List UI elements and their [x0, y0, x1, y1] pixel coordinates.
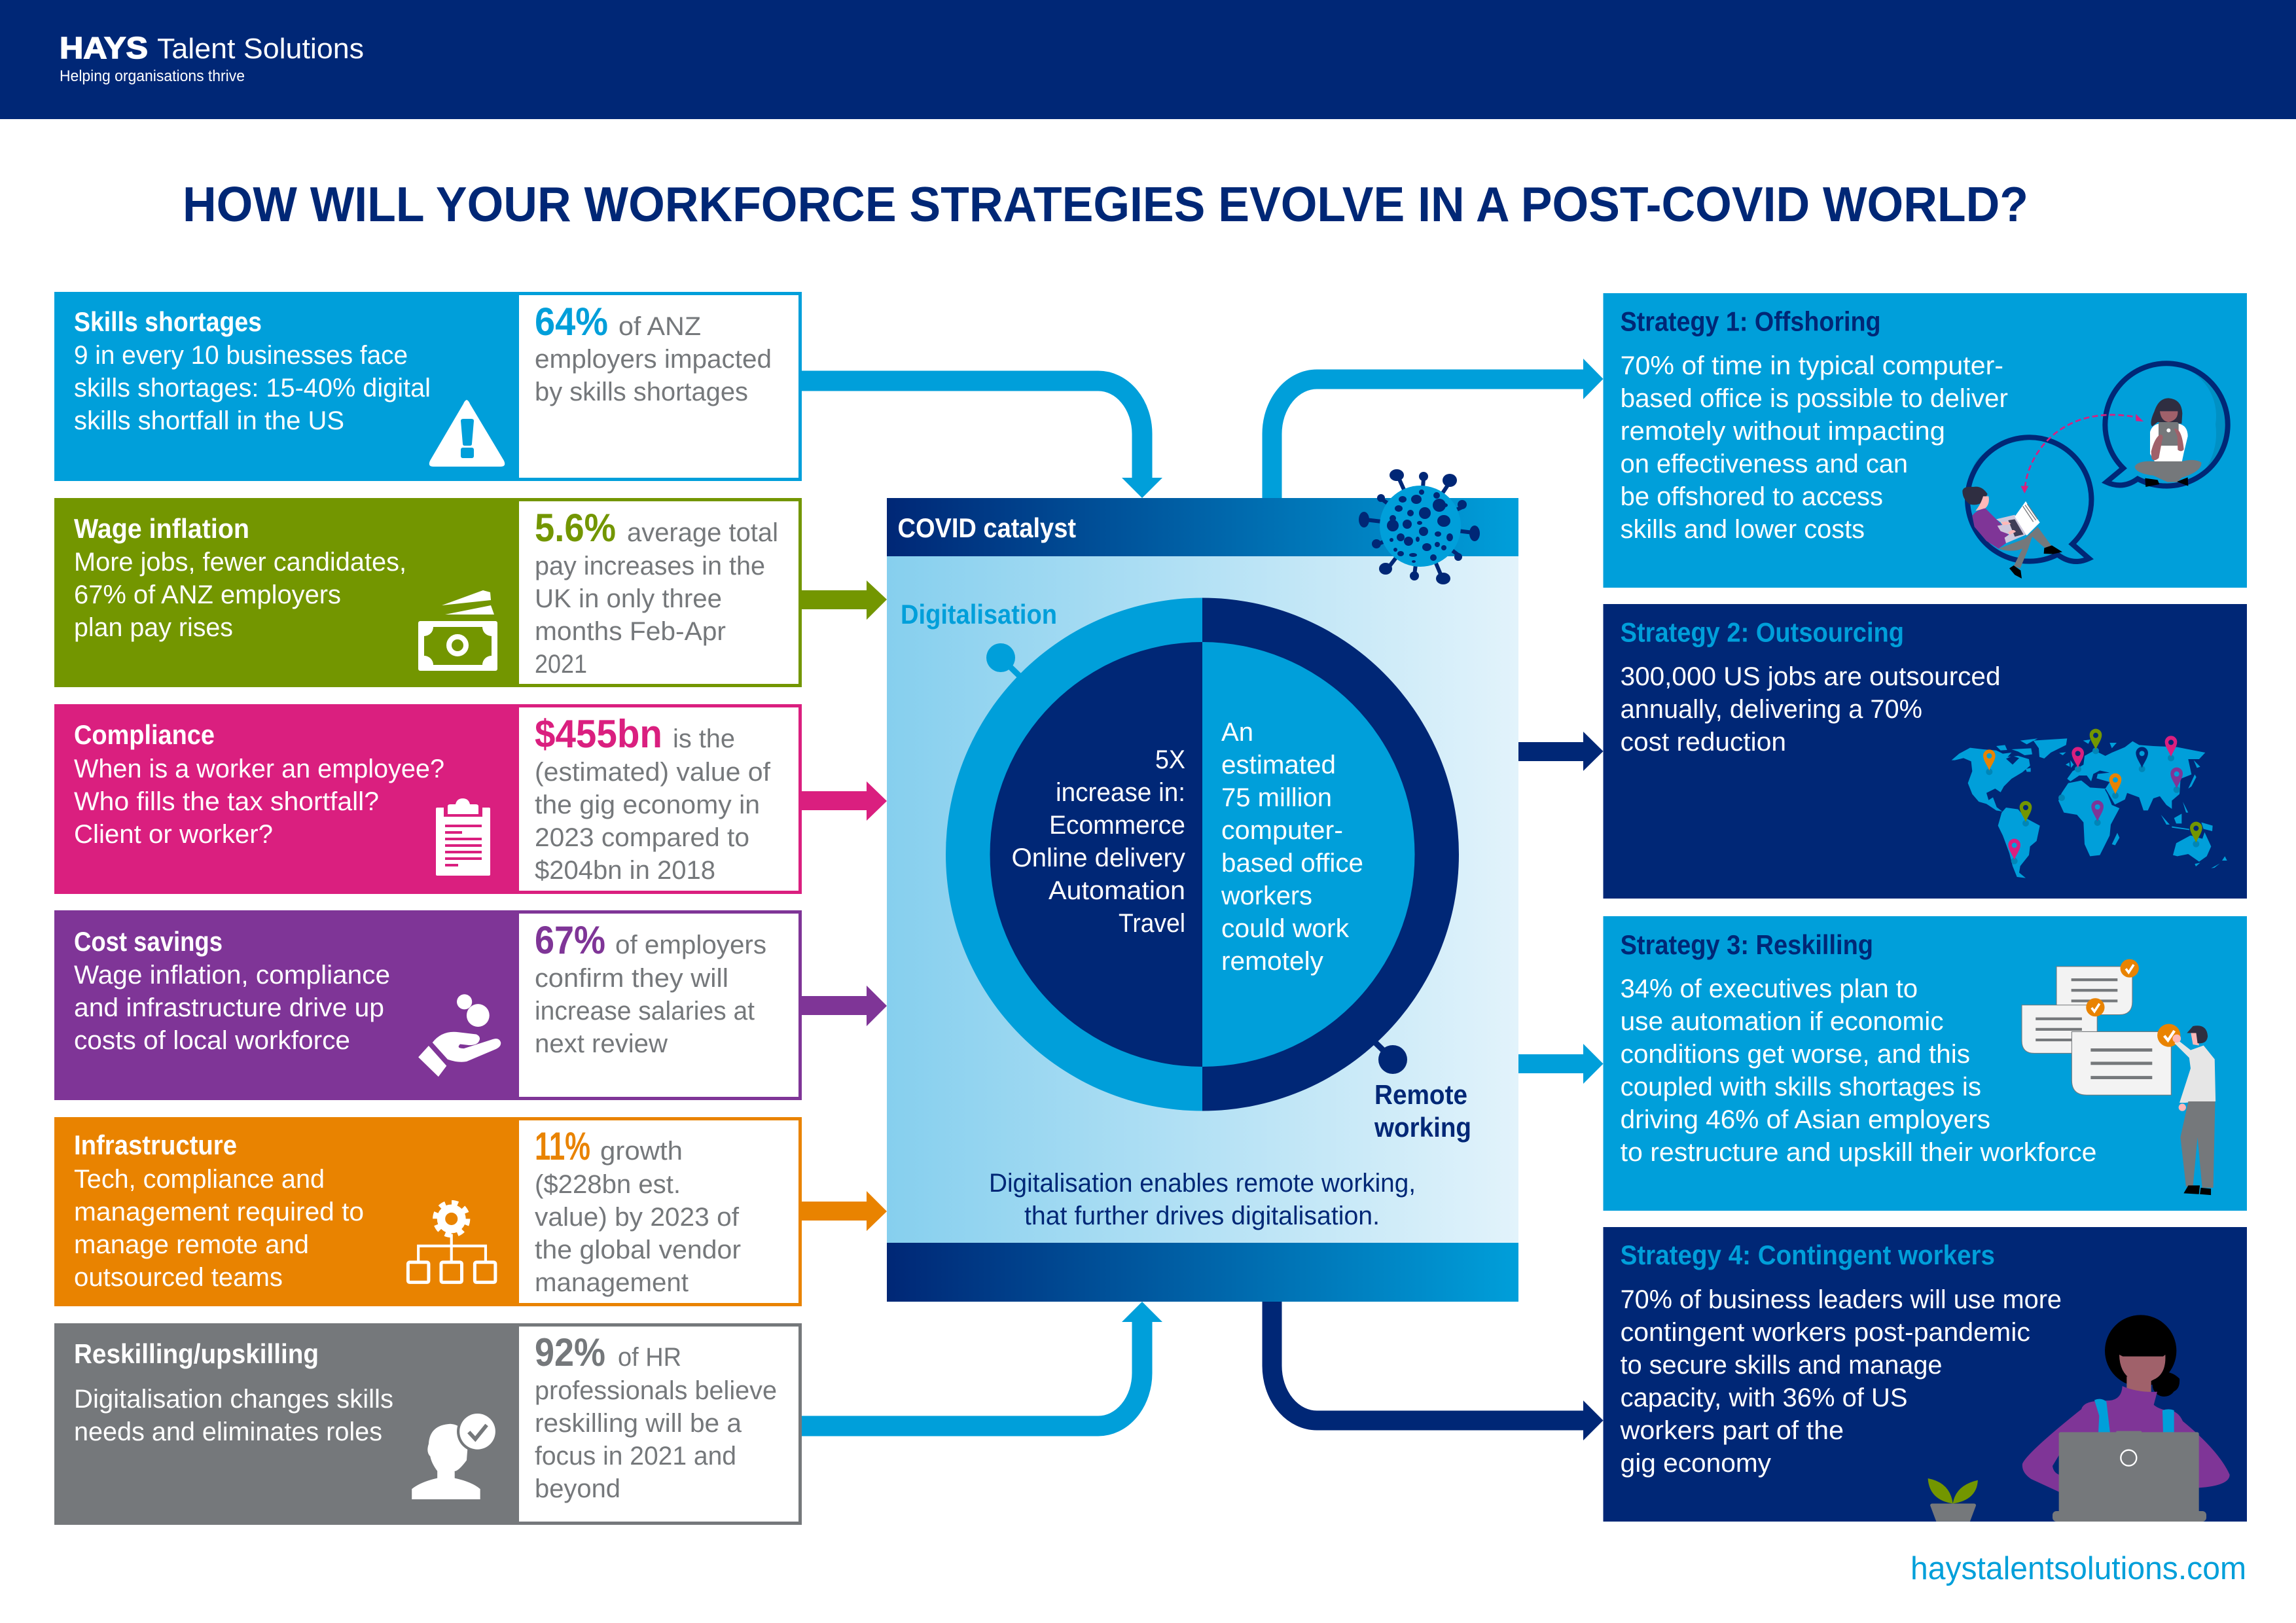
- arrow: reskilling into COVID catalyst: [802, 1302, 1162, 1426]
- text: digitalisation facts: Automation: [1049, 876, 1185, 905]
- stat: 11%: growth: [600, 1137, 683, 1166]
- text: strategy 3: conditions get worse, and this: [1621, 1040, 1970, 1069]
- stat: 64%: employers impacted: [535, 345, 772, 374]
- text: remote working facts: 75 million: [1221, 783, 1332, 812]
- panel: Strategy 3 Reskilling: [1604, 916, 2247, 1211]
- illustration: woman with laptop: [2022, 1315, 2230, 1522]
- text: infrastructure description: [74, 1165, 364, 1292]
- heading: Strategy 1: Strategy 1: Offshoring: [1621, 306, 1881, 336]
- panel: Strategy 4 Contingent workers: [1604, 1227, 2247, 1522]
- label: Remote working: Remote: [1374, 1079, 1467, 1110]
- heading: Cost savings: Cost savings: [74, 926, 223, 957]
- text: strategy 4: workers part of the: [1620, 1416, 1844, 1445]
- footer: website: haystalentsolutions.com: [1910, 1551, 2246, 1586]
- stat: 92%: focus in 2021 and: [535, 1442, 736, 1471]
- text: cost description: [74, 961, 390, 1055]
- stat: 64%: [535, 300, 772, 406]
- panel: Skills shortages: [54, 292, 800, 481]
- text: remote working facts: computer-: [1221, 816, 1343, 845]
- text: digitalisation facts: Online delivery: [1012, 844, 1185, 872]
- illustration: remote workers in speech bubbles: [1962, 363, 2228, 579]
- heading: Infrastructure: Infrastructure: [74, 1130, 237, 1160]
- title: HOW WILL YOUR WORKFORCE STRATEGIES EVOLVE IN A POST-COVID WORLD?: [183, 177, 2028, 232]
- text: digitalisation facts: [1012, 745, 1185, 938]
- text: strategy 1: skills and lower costs: [1621, 515, 1865, 544]
- text: skills description: skills shortfall in the US: [74, 406, 344, 435]
- stat: 67%: next review: [535, 1029, 668, 1058]
- stat: 92%: [535, 1330, 777, 1503]
- text: digitalisation facts: Travel: [1119, 909, 1185, 938]
- text: compliance description: Who fills the tax shortfall?: [74, 787, 379, 816]
- chart: digitalisation and remote working cycle: [946, 598, 1459, 1111]
- stat: 67%: increase salaries at: [535, 997, 755, 1026]
- text: cost description: Wage inflation, compliance: [74, 961, 390, 990]
- text: strategy 4: capacity, with 36% of US: [1621, 1383, 1907, 1412]
- arrow: catalyst to strategy 1: [1272, 359, 1604, 501]
- text: strategy 4: gig economy: [1621, 1449, 1771, 1478]
- logo: HAYS Talent Solutions: HAYS: [60, 31, 148, 65]
- stat: 92%: reskilling will be a: [535, 1409, 742, 1438]
- stat: 11%: ($228bn est.: [535, 1170, 681, 1199]
- logo: HAYS Talent Solutions: [60, 31, 364, 85]
- connector pin: digitalisation: [986, 643, 1024, 681]
- text: strategy 3: coupled with skills shortages is: [1621, 1073, 1981, 1101]
- logo: HAYS Talent Solutions: Talent Solutions: [157, 33, 364, 65]
- stat: 11%: the global vendor: [535, 1236, 741, 1264]
- text: strategy 2: cost reduction: [1621, 728, 1786, 757]
- stat: 64%: of ANZ: [619, 312, 701, 341]
- connector pin: remote working: [1372, 1039, 1407, 1074]
- text: infrastructure description: outsourced teams: [74, 1263, 283, 1292]
- arrow: skills shortages into COVID catalyst: [802, 381, 1162, 498]
- text: infrastructure description: management required to: [74, 1198, 364, 1226]
- stat: 92%: beyond: [535, 1474, 620, 1503]
- text: strategy 4: [1620, 1285, 2062, 1478]
- panel: Cost savings: [54, 910, 800, 1100]
- heading: Wage inflation: Wage inflation: [74, 513, 249, 544]
- caption: [989, 1169, 1416, 1230]
- text: compliance description: Client or worker?: [74, 820, 273, 849]
- panel: Strategy 2 Outsourcing: [1604, 604, 2247, 899]
- text: strategy 1: 70% of time in typical computer-: [1621, 351, 2003, 380]
- text: strategy 2: [1621, 662, 2000, 757]
- icon: gear and organisation chart: [408, 1203, 495, 1282]
- text: strategy 3: driving 46% of Asian employers: [1621, 1105, 1990, 1134]
- stat: 5.6%: UK in only three: [535, 584, 722, 613]
- heading: Strategy 2: Strategy 2: Outsourcing: [1621, 616, 1904, 648]
- text: cost description: and infrastructure drive up: [74, 993, 384, 1022]
- icon: warning triangle: [429, 400, 505, 467]
- icon: hand holding coins: [418, 994, 501, 1077]
- text: remote working facts: An: [1221, 718, 1253, 747]
- arrow: compliance: [802, 781, 887, 821]
- text: digitalisation facts: 5X: [1155, 745, 1185, 774]
- stat: 64%: by skills shortages: [535, 378, 748, 406]
- text: skills description: skills shortages: 15-40% digital: [74, 374, 431, 402]
- text: strategy 3: [1621, 974, 2097, 1167]
- panel: COVID catalyst: [887, 469, 1518, 1302]
- top bar: [887, 498, 1518, 556]
- text: strategy 4: contingent workers post-pandemic: [1621, 1318, 2030, 1347]
- heading: Compliance: Compliance: [74, 719, 215, 750]
- heading: Strategy 3: Strategy 3: Reskilling: [1621, 929, 1873, 960]
- text: compliance description: [74, 755, 444, 849]
- panel: Infrastructure: [54, 1117, 800, 1306]
- heading: COVID catalyst: COVID catalyst: [898, 512, 1076, 543]
- text: strategy 1: remotely without impacting: [1621, 417, 1945, 446]
- text: strategy 4: 70% of business leaders will use more: [1621, 1285, 2062, 1314]
- stat: 5.6%: 5.6%: [535, 506, 616, 550]
- panel: Wage inflation: [54, 498, 800, 687]
- stat: $455bn: [535, 712, 771, 885]
- caption: Digitalisation enables remote working,: [989, 1169, 1416, 1198]
- text: skills description: [74, 341, 431, 435]
- arrow: cost savings: [802, 986, 887, 1026]
- text: remote working facts: remotely: [1221, 947, 1323, 976]
- text: wage description: More jobs, fewer candidates,: [74, 548, 406, 577]
- text: remote working facts: estimated: [1221, 751, 1336, 779]
- text: digitalisation facts: Ecommerce: [1049, 811, 1185, 840]
- stat: $455bn: $455bn: [535, 712, 662, 756]
- illustration: potted plant: [1928, 1478, 1978, 1522]
- arrow: catalyst to strategy 2: [1518, 732, 1604, 771]
- icon: virus: [1359, 469, 1480, 584]
- bottom bar: [887, 1243, 1518, 1302]
- label: Remote working: working: [1374, 1112, 1471, 1143]
- panel: Compliance: [54, 704, 800, 894]
- text: strategy 2: annually, delivering a 70%: [1621, 695, 1922, 724]
- stat: $455bn: the gig economy in: [535, 791, 760, 819]
- text: digitalisation facts: increase in:: [1056, 778, 1185, 807]
- stat: 5.6%: [535, 506, 778, 679]
- text: remote working facts: workers: [1221, 882, 1312, 910]
- text: wage description: plan pay rises: [74, 613, 233, 642]
- heading: Reskilling/upskilling: Reskilling/upskilling: [74, 1338, 319, 1369]
- stat: 92%: of HR: [618, 1343, 681, 1372]
- stat: 11%: value) by 2023 of: [535, 1203, 740, 1232]
- text: strategy 4: to secure skills and manage: [1621, 1351, 1943, 1380]
- text: strategy 3: 34% of executives plan to: [1621, 974, 1918, 1003]
- arrow: wage inflation: [802, 580, 887, 620]
- text: remote working facts: [1221, 718, 1363, 976]
- text: strategy 3: use automation if economic: [1621, 1007, 1944, 1036]
- text: remote working facts: could work: [1221, 914, 1350, 943]
- stat: 67%: confirm they will: [535, 964, 728, 993]
- panel: Reskilling/upskilling: [54, 1323, 800, 1525]
- logo: HAYS Talent Solutions: Helping organisations thrive: [60, 67, 245, 85]
- stat: 11%: 11%: [535, 1124, 590, 1168]
- caption: that further drives digitalisation.: [1024, 1202, 1380, 1230]
- text: strategy 1: on effectiveness and can: [1621, 450, 1908, 478]
- illustration: person ticking off documents: [2022, 959, 2215, 1195]
- stat: 67%: [535, 918, 766, 1058]
- arrow: catalyst to strategy 4: [1272, 1299, 1604, 1440]
- text: skills description: 9 in every 10 businesses face: [74, 341, 408, 370]
- stat: $455bn: (estimated) value of: [535, 758, 771, 787]
- stat: 67%: of employers: [615, 931, 766, 959]
- stat: 92%: professionals believe: [535, 1376, 777, 1405]
- header band with logo: [0, 0, 2296, 119]
- text: strategy 2: 300,000 US jobs are outsourced: [1621, 662, 2000, 691]
- stat: 5.6%: months Feb-Apr: [535, 617, 726, 646]
- label: Digitalisation: Digitalisation: [901, 599, 1057, 630]
- heading: Skills shortages: Skills shortages: [74, 306, 262, 337]
- text: compliance description: When is a worker an employee?: [74, 755, 444, 783]
- gradient background: [887, 556, 1518, 1243]
- stat: 5.6%: average total: [627, 518, 778, 547]
- stat: 67%: 67%: [535, 918, 605, 962]
- text: reskilling description: [74, 1385, 393, 1446]
- stat: 11%: [535, 1124, 741, 1297]
- text: wage description: 67% of ANZ employers: [74, 580, 341, 609]
- arrow: infrastructure: [802, 1191, 887, 1231]
- stat: $455bn: 2023 compared to: [535, 823, 749, 852]
- text: infrastructure description: Tech, compliance and: [74, 1165, 325, 1194]
- stat: 11%: management: [535, 1268, 689, 1297]
- text: strategy 3: to restructure and upskill their workforce: [1621, 1138, 2097, 1167]
- stat: 64%: 64%: [535, 300, 608, 344]
- stat: 5.6%: 2021: [535, 650, 587, 679]
- text: strategy 1: [1621, 351, 2008, 544]
- icon: clipboard: [436, 798, 490, 876]
- text: strategy 1: be offshored to access: [1621, 482, 1883, 511]
- stat: $455bn: is the: [673, 724, 735, 753]
- text: reskilling description: needs and eliminates roles: [74, 1418, 382, 1446]
- stat: 5.6%: pay increases in the: [535, 552, 765, 580]
- text: infrastructure description: manage remote and: [74, 1230, 309, 1259]
- stat: $455bn: $204bn in 2018: [535, 856, 715, 885]
- label: Remote working: [1374, 1079, 1471, 1143]
- text: remote working facts: based office: [1221, 849, 1363, 878]
- icon: banknotes: [418, 590, 497, 671]
- text: cost description: costs of local workforce: [74, 1026, 350, 1055]
- text: wage description: [74, 548, 406, 642]
- panel: Strategy 1 Offshoring: [1604, 293, 2247, 588]
- stat: 92%: 92%: [535, 1330, 605, 1374]
- text: reskilling description: Digitalisation changes skills: [74, 1385, 393, 1414]
- icon: head with check mark: [412, 1411, 498, 1499]
- heading: Strategy 4: Strategy 4: Contingent workers: [1621, 1240, 1995, 1270]
- arrow: catalyst to strategy 3: [1518, 1044, 1604, 1084]
- illustration: world map with location pins: [1952, 729, 2227, 878]
- text: strategy 1: based office is possible to deliver: [1621, 384, 2008, 413]
